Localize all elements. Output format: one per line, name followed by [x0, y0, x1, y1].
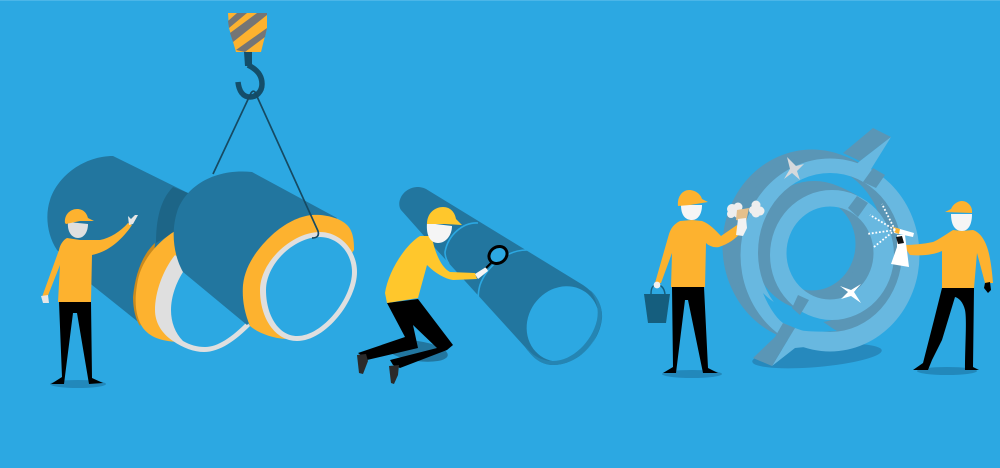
- crane hook block: [228, 13, 267, 52]
- crane hook: [238, 52, 262, 97]
- lifting cables: [213, 91, 318, 238]
- worker with bucket and brush: [644, 190, 764, 378]
- sparkle: white star: [840, 284, 861, 303]
- inspected pipe: [399, 187, 614, 376]
- front hanging pipe with orange end: [174, 172, 357, 341]
- worker with magnifying glass: [357, 207, 510, 384]
- worker directing the crane: [41, 209, 138, 388]
- spray mist: [867, 204, 895, 247]
- worker with spray bottle: [891, 201, 993, 375]
- back pipe with orange end: [47, 156, 250, 352]
- slashed ring emblem: [722, 128, 920, 366]
- shadow under emblem: [751, 339, 883, 373]
- sparkle: grey star: [784, 157, 804, 180]
